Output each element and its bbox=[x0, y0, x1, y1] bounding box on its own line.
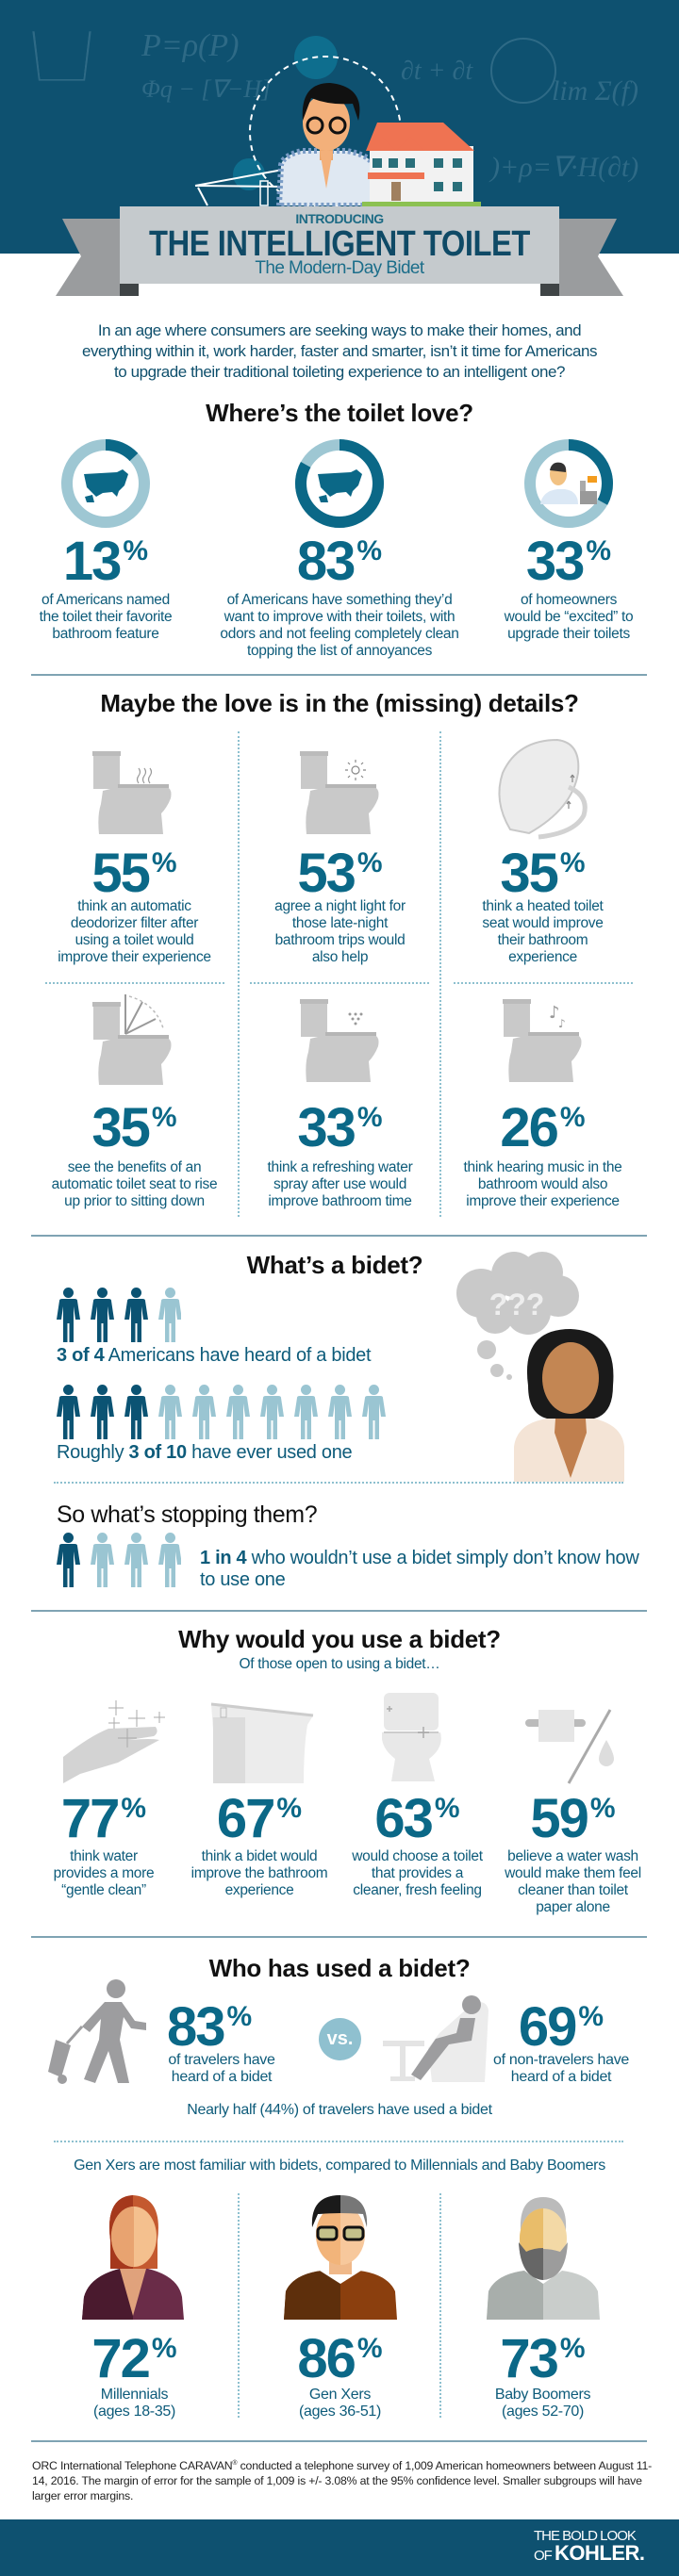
stat 13% bbox=[40, 531, 172, 642]
reason: gentle clean: provides a more bbox=[54, 1865, 154, 1881]
icon: front toilet bbox=[382, 1693, 441, 1781]
detail: night light: agree a night light for bbox=[274, 898, 406, 914]
stat 33%: 33% bbox=[526, 531, 611, 592]
icon: toilet deodorizer bbox=[92, 751, 172, 834]
reason: water wash: would make them feel bbox=[505, 1865, 641, 1881]
reason: gentle clean bbox=[54, 1700, 165, 1898]
intro paragraph: In an age where consumers are seeking ways to make their homes, and bbox=[98, 321, 581, 339]
detail: water spray: improve bathroom time bbox=[268, 1193, 412, 1209]
stat 33%: upgrade their toilets bbox=[507, 626, 630, 642]
heading: where's the toilet love: Where’s the toilet love? bbox=[206, 399, 473, 427]
donut 33% bbox=[524, 439, 613, 528]
stat: 83% travelers: of travelers have bbox=[168, 2052, 275, 2068]
stat: 83% travelers: 83% bbox=[167, 1996, 252, 2058]
detail: auto seat: see the benefits of an bbox=[68, 1159, 201, 1175]
detail: heated seat: seat would improve bbox=[482, 915, 604, 931]
stat 33%: would be “excited” to bbox=[505, 609, 633, 625]
reason: improve experience: think a bidet would bbox=[202, 1848, 317, 1864]
icon: non-traveler in chair bbox=[383, 1995, 489, 2082]
detail: night light: 53% bbox=[297, 843, 383, 904]
text: 1 in 4: 1 in 4 who wouldn’t use a bidet simply don’t know how to use one bbox=[200, 1548, 638, 1590]
intro paragraph bbox=[82, 321, 597, 381]
stat 13%: the toilet their favorite bbox=[40, 609, 172, 625]
vs badge bbox=[319, 2018, 361, 2060]
reason: improve experience bbox=[191, 1702, 327, 1898]
title banner bbox=[56, 206, 623, 296]
illustration: woman with question cloud: ??? bbox=[489, 1288, 544, 1321]
intro paragraph: everything within it, work harder, faster and smarter, isn’t it time for Americans bbox=[82, 342, 597, 360]
detail: music: bathroom would also bbox=[478, 1176, 607, 1192]
intro paragraph: to upgrade their traditional toileting experience to an intelligent one? bbox=[114, 363, 565, 381]
stat 83% bbox=[220, 531, 459, 659]
detail: water spray: think a refreshing water bbox=[268, 1159, 412, 1175]
icon: toilet water spray bbox=[300, 999, 379, 1082]
reason: gentle clean: “gentle clean” bbox=[61, 1882, 146, 1898]
detail: deodorizer bbox=[58, 751, 211, 965]
reason: improve experience: experience bbox=[225, 1882, 293, 1898]
donut 13% bbox=[61, 439, 150, 528]
generation: millennials: 72% bbox=[91, 2328, 177, 2389]
logo: kohler: THE BOLD LOOK bbox=[534, 2528, 636, 2544]
stat 33%: of homeowners bbox=[521, 592, 617, 608]
vs badge: vs. bbox=[327, 2028, 353, 2049]
stat: 69% non-travelers: 69% bbox=[519, 1996, 604, 2058]
reason: water wash: cleaner than toilet bbox=[518, 1882, 628, 1898]
detail: deodorizer: using a toilet would bbox=[75, 932, 193, 948]
detail: deodorizer: 55% bbox=[91, 843, 177, 904]
text: nearly half: Nearly half (44%) of travelers have used a bidet bbox=[187, 2102, 492, 2118]
stat 33% bbox=[504, 531, 633, 642]
stat 83%: 83% bbox=[297, 531, 382, 592]
reason: fresh feeling bbox=[352, 1693, 483, 1898]
detail: night light: bathroom trips would bbox=[275, 932, 405, 948]
footer bar bbox=[0, 2519, 679, 2576]
icon: toilet music: ♪ bbox=[558, 1017, 566, 1030]
footnote: ORC International Telephone CARAVAN® conducted a telephone survey of 1,009 American homeowners between August 11-14, 2016. The margin of error for the sample of 1,009 is +/- 3.08% at the 95% confidence level. Smaller subgroups will have larger error margins. bbox=[32, 2459, 652, 2502]
stat 83%: topping the list of annoyances bbox=[247, 643, 432, 659]
generation: millennials: Millennials bbox=[101, 2387, 168, 2403]
subheading: Of those open to using a bidet… bbox=[239, 1656, 439, 1672]
main title: THE INTELLIGENT TOILET bbox=[149, 224, 530, 264]
stat: 69% non-travelers bbox=[493, 1996, 629, 2085]
heading: who has used a bidet: Who has used a bidet? bbox=[209, 1954, 470, 1982]
text: 3 of 10: Roughly 3 of 10 have ever used one bbox=[57, 1442, 352, 1463]
stat 13%: bathroom feature bbox=[52, 626, 159, 642]
icon: toilet seat rising bbox=[92, 994, 172, 1085]
text: gen x intro: Gen Xers are most familiar with bidets, compared to Millennials and Baby Boomers bbox=[74, 2158, 605, 2174]
generation: gen x: Gen Xers bbox=[309, 2387, 371, 2403]
detail: heated seat bbox=[482, 739, 604, 965]
reason: gentle clean: think water bbox=[70, 1848, 138, 1864]
detail: auto seat: automatic toilet seat to rise bbox=[52, 1176, 217, 1192]
stat 13%: of Americans named bbox=[41, 592, 170, 608]
donut 83% bbox=[295, 439, 384, 528]
stat: 69% non-travelers: heard of a bidet bbox=[511, 2069, 611, 2085]
icon: toilet music: ♪ bbox=[549, 1003, 560, 1023]
icon: toilet music bbox=[503, 999, 581, 1082]
stat 83%: odors and not feeling completely clean bbox=[220, 626, 459, 642]
stat 83%: of Americans have something they’d bbox=[227, 592, 452, 608]
icon: traveler bbox=[48, 1979, 146, 2084]
detail: water spray: 33% bbox=[297, 1097, 383, 1158]
illustration: woman with question cloud bbox=[456, 1252, 624, 1482]
detail: night light: also help bbox=[312, 949, 368, 965]
header background: ∂t + ∂t bbox=[401, 57, 472, 86]
reason: gentle clean: 77% bbox=[61, 1788, 146, 1849]
stat: 83% travelers bbox=[167, 1996, 275, 2085]
reason: water wash: 59% bbox=[530, 1788, 616, 1849]
heading: why would you use a bidet: Why would you use a bidet? bbox=[178, 1625, 501, 1653]
header background: )+ρ=∇·H(∂t) bbox=[490, 152, 638, 183]
generation: baby boomers: Baby Boomers bbox=[495, 2387, 590, 2403]
reason: fresh feeling: would choose a toilet bbox=[352, 1848, 483, 1864]
stat: 69% non-travelers: of non-travelers have bbox=[493, 2052, 629, 2068]
icon: boomer man bbox=[487, 2193, 600, 2320]
header background: Φq − [∇−H] bbox=[141, 75, 271, 103]
introducing: INTRODUCING bbox=[295, 211, 384, 226]
reason: water wash bbox=[505, 1709, 641, 1915]
reason: water wash: believe a water wash bbox=[507, 1848, 638, 1864]
reason: improve experience: improve the bathroom bbox=[191, 1865, 327, 1881]
reason: fresh feeling: cleaner, fresh feeling bbox=[353, 1882, 482, 1898]
generation: baby boomers: 73% bbox=[500, 2328, 586, 2389]
detail: music: 26% bbox=[500, 1097, 586, 1158]
generation: gen x: (ages 36-51) bbox=[299, 2404, 381, 2420]
detail: auto seat bbox=[52, 994, 217, 1209]
hero illustration bbox=[194, 36, 481, 206]
detail: water spray: spray after use would bbox=[273, 1176, 406, 1192]
generation: millennials bbox=[38, 2193, 231, 2420]
stat 83%: want to improve with their toilets, with bbox=[224, 609, 455, 625]
icon: hand with sparkles bbox=[63, 1700, 165, 1783]
detail: heated seat: experience bbox=[508, 949, 577, 965]
subtitle: The Modern-Day Bidet bbox=[255, 258, 424, 278]
detail: deodorizer: improve their experience bbox=[58, 949, 211, 965]
logo: kohler bbox=[534, 2529, 656, 2566]
people row: 3 of 10 bbox=[57, 1385, 386, 1439]
header background bbox=[0, 0, 679, 254]
detail: auto seat: 35% bbox=[91, 1097, 177, 1158]
icon: heated seat bbox=[498, 739, 588, 839]
reason: fresh feeling: 63% bbox=[374, 1788, 460, 1849]
generation: millennials: (ages 18-35) bbox=[93, 2404, 175, 2420]
detail: deodorizer: think an automatic bbox=[77, 898, 191, 914]
generation: baby boomers: (ages 52-70) bbox=[502, 2404, 584, 2420]
icon: gen x man bbox=[284, 2193, 397, 2320]
detail: heated seat: think a heated toilet bbox=[482, 898, 604, 914]
heading: missing details: Maybe the love is in the (missing) details? bbox=[100, 689, 579, 717]
icon: intelligent toilet bbox=[211, 1702, 313, 1783]
header background: P=ρ(P) bbox=[141, 28, 239, 63]
subheading: what's stopping them: So what’s stopping them? bbox=[57, 1501, 317, 1528]
detail: music: improve their experience bbox=[466, 1193, 620, 1209]
people row: 3 of 4 bbox=[57, 1288, 181, 1342]
detail: heated seat: 35% bbox=[500, 843, 586, 904]
text: 3 of 4: 3 of 4 Americans have heard of a bidet bbox=[57, 1345, 371, 1366]
detail: water spray bbox=[268, 999, 413, 1209]
generation: gen x: 86% bbox=[297, 2328, 383, 2389]
reason: improve experience: 67% bbox=[217, 1788, 302, 1849]
generation: baby boomers bbox=[446, 2193, 639, 2420]
icon: millennial woman bbox=[82, 2193, 186, 2320]
stat: 83% travelers: heard of a bidet bbox=[172, 2069, 272, 2085]
people row: 1 in 4 bbox=[57, 1533, 181, 1587]
icon: paper vs water bbox=[525, 1709, 614, 1784]
detail: auto seat: up prior to sitting down bbox=[64, 1193, 205, 1209]
detail: deodorizer: deodorizer filter after bbox=[71, 915, 198, 931]
header background: lim Σ(f) bbox=[552, 75, 638, 107]
icon: toilet night light bbox=[300, 751, 379, 834]
reason: fresh feeling: that provides a bbox=[372, 1865, 463, 1881]
reason: water wash: paper alone bbox=[536, 1899, 610, 1915]
logo: kohler: OF KOHLER. bbox=[534, 2541, 645, 2565]
detail: night light: those late-night bbox=[292, 915, 388, 931]
detail: music: think hearing music in the bbox=[464, 1159, 621, 1175]
detail: night light bbox=[274, 751, 406, 965]
detail: music bbox=[464, 999, 622, 1209]
detail: heated seat: their bathroom bbox=[498, 932, 588, 948]
stat 13%: 13% bbox=[63, 531, 148, 592]
generation: gen x bbox=[243, 2193, 437, 2420]
heading: what's a bidet: What’s a bidet? bbox=[247, 1251, 422, 1279]
